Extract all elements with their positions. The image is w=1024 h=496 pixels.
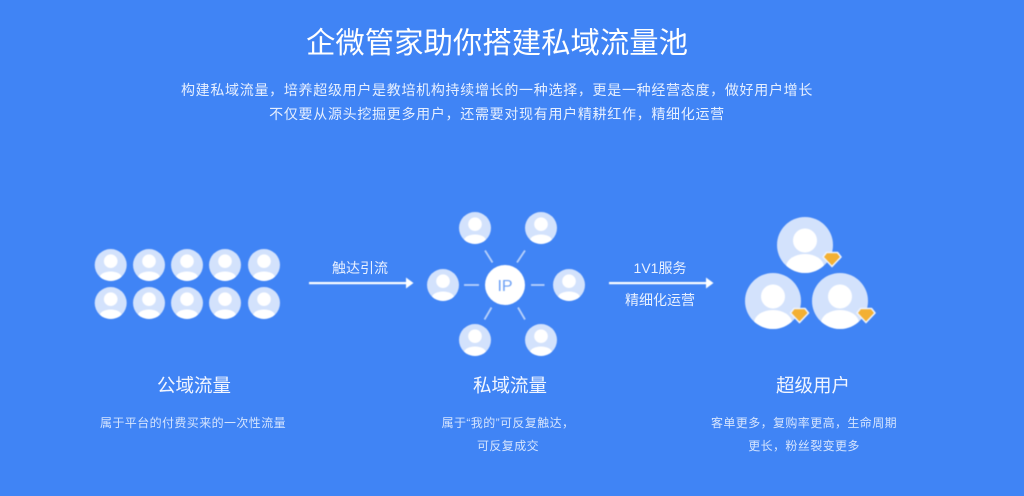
description: private traffic: 属于“我的”可反复触达， [442,416,574,430]
icon group: super users with diamonds [745,217,875,336]
network: private traffic around IP: IP [497,278,513,295]
arrow: private to super [609,278,714,288]
heading: private traffic: 私域流量 [473,374,547,396]
arrow label: refined operation: 精细化运营 [625,292,695,308]
heading: super users: 超级用户 [776,374,850,396]
network: private traffic around IP [427,212,585,358]
arrow label: 1V1 service: 1V1服务 [634,260,686,276]
subtitle text [181,82,813,122]
description: private traffic [442,416,574,453]
arrow: public to private [309,278,414,288]
subtitle text: 构建私域流量，培养超级用户是教培机构持续增长的一种选择，更是一种经营态度，做好用户增长 [181,82,813,98]
arrow label: reach: 触达引流 [332,260,388,276]
title: 企微管家助你搭建私域流量池 [306,27,688,60]
description: super users: 客单更多，复购率更高，生命周期 [711,416,897,430]
description: super users [711,416,897,453]
heading: public traffic: 公域流量 [157,374,231,396]
subtitle text: 不仅要从源头挖掘更多用户，还需要对现有用户精耕红作，精细化运营 [269,106,725,122]
icon group: public traffic users [95,249,280,322]
description: super users: 更长，粉丝裂变更多 [748,439,860,453]
description: public traffic: 属于平台的付费买来的一次性流量 [100,416,286,430]
description: private traffic: 可反复成交 [477,439,539,453]
